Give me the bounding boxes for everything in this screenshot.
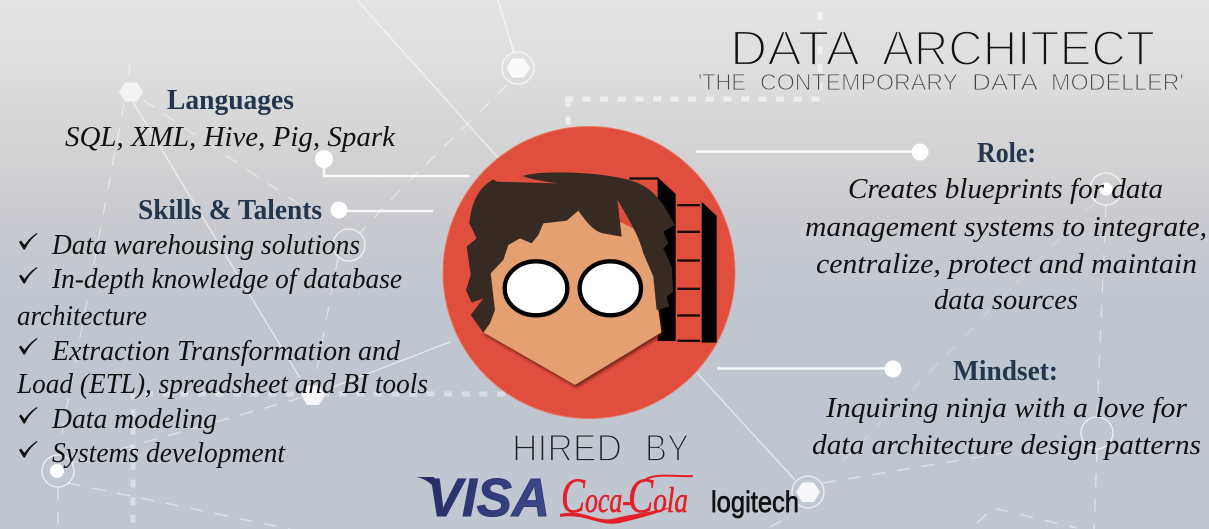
hair [466, 172, 675, 333]
icon: check [19, 407, 38, 424]
panel: mindset [812, 356, 1201, 461]
heading: hired by: HIRED [512, 428, 622, 470]
panel: skills and talents [16, 195, 428, 469]
logo: Coca-Cola: Cola [628, 467, 688, 523]
hired by section [417, 428, 799, 528]
languages list: SQL, XML, Hive, Pig, Spark [65, 122, 396, 153]
heading: languages: Languages [167, 85, 294, 116]
connector: skills [330, 202, 433, 218]
role description: management systems to integrate, [805, 212, 1207, 243]
icon: check [19, 267, 38, 284]
role description [805, 174, 1207, 316]
subtitle: CONTEMPORARY [760, 69, 958, 95]
subtitle [698, 69, 1184, 95]
icon: check [19, 338, 38, 354]
role description: centralize, protect and maintain [816, 249, 1197, 280]
subtitle: DATA [972, 69, 1039, 95]
icon: check [19, 233, 38, 250]
skills checklist [16, 230, 428, 469]
skill: ETL: Extraction Transformation and [51, 336, 401, 367]
right glasses lens [580, 261, 641, 315]
mindset description: data architecture design patterns [812, 430, 1201, 461]
left glasses lens [505, 261, 567, 315]
logo: Coca-Cola: Coca- [561, 467, 631, 523]
panel: role [805, 138, 1207, 316]
connector: mindset [717, 360, 902, 378]
red circle [443, 126, 735, 418]
skill: systems development: Systems development [52, 438, 286, 469]
panel: languages [65, 85, 396, 153]
skill text continued: architecture [17, 301, 147, 332]
title [698, 22, 1184, 95]
heading: skills: Skills & Talents [138, 195, 322, 226]
role description: Creates blueprints for data [848, 174, 1163, 205]
logo: Visa: VISA [427, 468, 550, 528]
heading: Data Architect [730, 22, 1155, 76]
connector: languages [315, 150, 470, 176]
portrait illustration [443, 126, 735, 418]
mindset description: Inquiring ninja with a love for [825, 393, 1187, 424]
subtitle: 'THE [698, 69, 746, 95]
heading: Data Architect: DATA [730, 22, 860, 76]
logo: Logitech: logitech [711, 486, 799, 519]
skill: database architecture: In-depth knowledge of database [51, 264, 402, 295]
connector: role [696, 144, 928, 160]
icon: brick tower [629, 177, 717, 343]
face [485, 203, 660, 383]
skill: data warehousing: Data warehousing solutions [51, 230, 360, 261]
role description: data sources [934, 285, 1078, 316]
heading: Data Architect: ARCHITECT [882, 22, 1155, 76]
icon: check [19, 441, 38, 458]
heading: role: Role: [977, 138, 1036, 169]
subtitle: MODELLER' [1051, 69, 1184, 95]
heading: hired by [512, 428, 689, 470]
heading: hired by: BY [645, 428, 689, 470]
logo: Coca-Cola [560, 467, 693, 524]
skill: data modeling: Data modeling [51, 404, 217, 435]
heading: mindset: Mindset: [953, 356, 1058, 387]
mindset description [812, 393, 1201, 461]
skill text continued: Load (ETL), spreadsheet and BI tools [16, 369, 428, 400]
